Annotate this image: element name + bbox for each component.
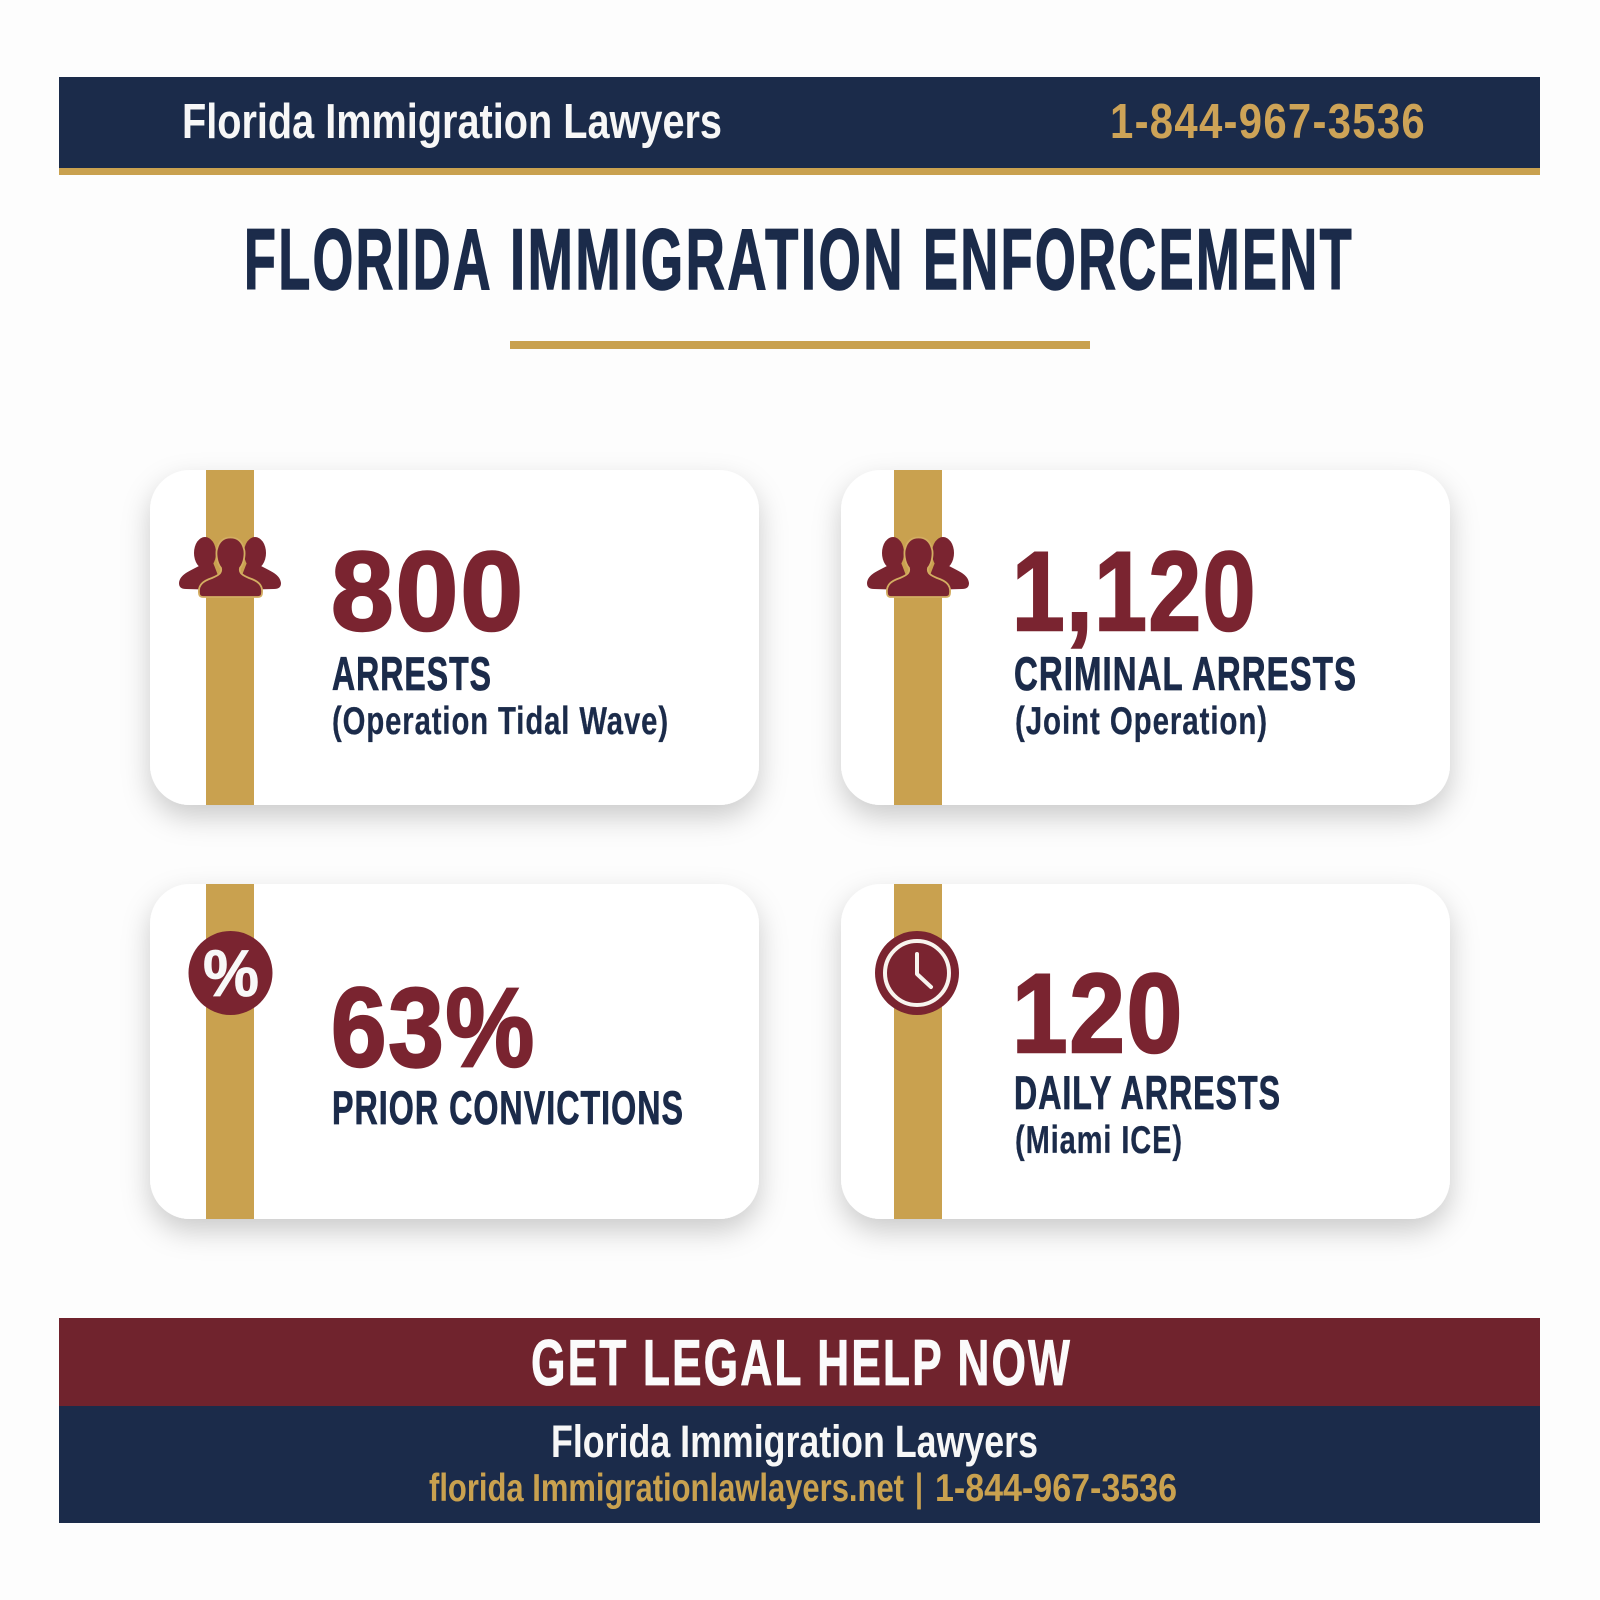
icon: percent badge: % — [203, 936, 259, 1010]
footer firm name: Florida Immigration Lawyers — [551, 1416, 1038, 1467]
stat sublabel: (Miami ICE) — [1015, 1119, 1183, 1162]
icon: group of people — [867, 537, 969, 597]
icon: clock — [875, 931, 959, 1015]
footer website and phone: 1-844-967-3536 — [935, 1467, 1177, 1510]
title: FLORIDA — [244, 212, 493, 308]
stat number: 1,120 — [1012, 529, 1257, 654]
header firm name: Florida Immigration Lawyers — [182, 95, 722, 149]
stat label: ARRESTS — [332, 647, 492, 700]
icon: percent badge — [188, 931, 272, 1015]
stat number: 800 — [331, 529, 525, 654]
header phone number: 1-844-967-3536 — [1110, 95, 1426, 149]
panel: 120 daily arrests — [841, 884, 1450, 1219]
call to action banner: GET LEGAL HELP NOW — [531, 1326, 1072, 1399]
panel: 800 arrests — [150, 470, 759, 805]
panel: 1,120 criminal arrests — [841, 470, 1450, 805]
footer website and phone: florida Immigrationlawlayers.net — [429, 1467, 904, 1510]
stat number: 63% — [331, 965, 536, 1090]
stat label: PRIOR CONVICTIONS — [332, 1081, 684, 1134]
footer website and phone: | — [915, 1467, 923, 1510]
panel: 63% prior convictions — [150, 884, 759, 1219]
title: IMMIGRATION — [510, 212, 905, 308]
title — [244, 212, 1354, 308]
stat sublabel: (Operation Tidal Wave) — [332, 700, 669, 743]
stat sublabel: (Joint Operation) — [1015, 700, 1268, 743]
footer contact bar — [59, 1406, 1540, 1523]
call to action banner — [59, 1318, 1540, 1406]
header bar — [59, 77, 1540, 175]
stat label: DAILY ARRESTS — [1014, 1066, 1281, 1119]
icon: group of people — [179, 537, 281, 597]
stat number: 120 — [1012, 951, 1184, 1076]
title underline — [510, 341, 1090, 349]
stat label: CRIMINAL ARRESTS — [1014, 647, 1357, 700]
